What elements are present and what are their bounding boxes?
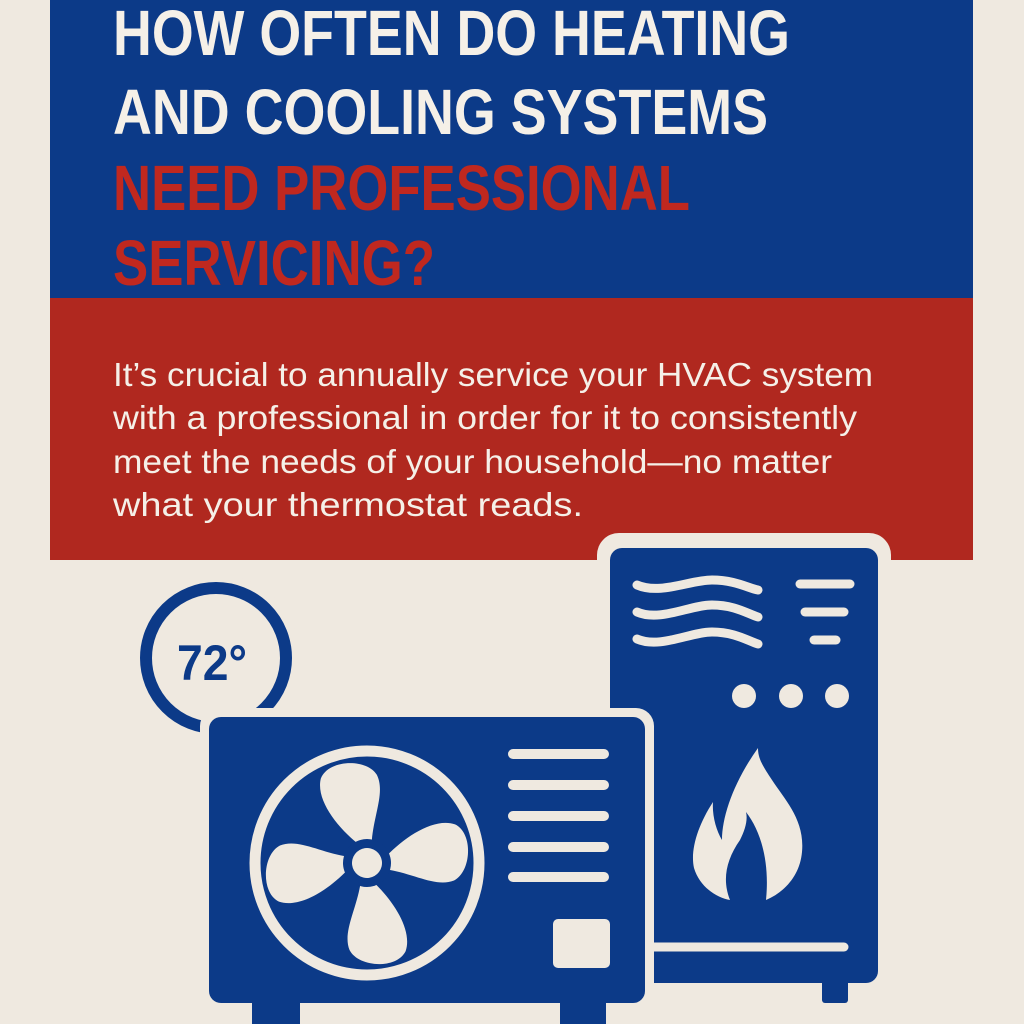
icon: flame bbox=[693, 748, 802, 900]
header panel bbox=[50, 0, 973, 560]
intro text block: with a professional in order for it to consistently bbox=[112, 399, 858, 436]
thermostat dial bbox=[132, 574, 300, 742]
furnace unit bbox=[597, 533, 891, 1003]
intro text block bbox=[50, 298, 973, 560]
title block bbox=[50, 0, 973, 299]
icon: fan blades bbox=[249, 748, 485, 981]
outdoor AC unit bbox=[200, 708, 654, 1024]
title block: AND COOLING SYSTEMS bbox=[113, 76, 768, 148]
intro text block: meet the needs of your household—no matter bbox=[113, 443, 832, 480]
title block: SERVICING? bbox=[113, 227, 435, 299]
thermostat dial: 72° bbox=[177, 635, 247, 691]
intro text block: what your thermostat reads. bbox=[112, 486, 583, 523]
illustration: HVAC units bbox=[140, 533, 891, 1024]
title block: NEED PROFESSIONAL bbox=[113, 152, 690, 224]
intro text block: It’s crucial to annually service your HVAC system bbox=[113, 356, 873, 393]
